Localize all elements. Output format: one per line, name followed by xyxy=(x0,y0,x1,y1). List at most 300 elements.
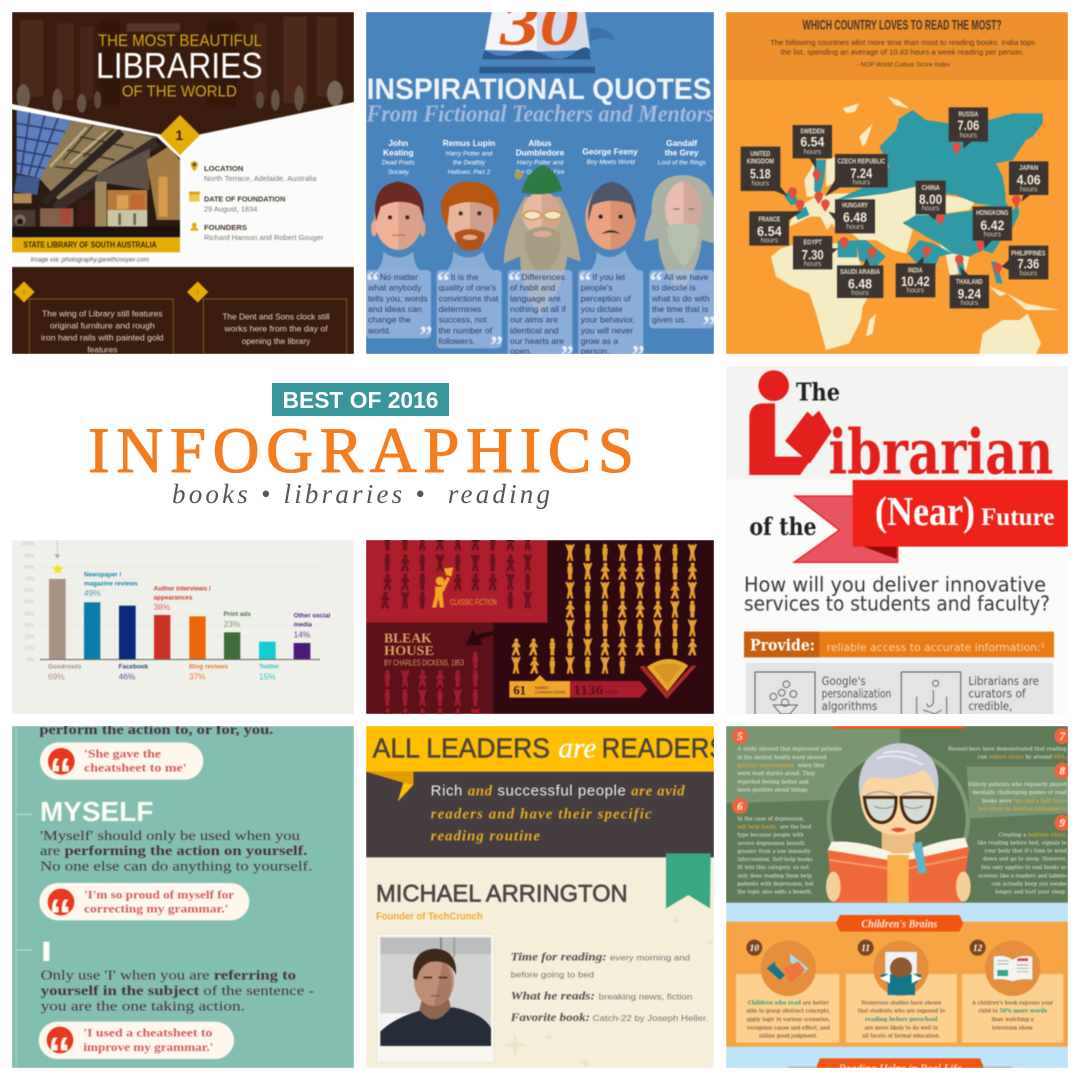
fact 8: 8 xyxy=(1059,766,1065,778)
stat bar: characters and pages: CHARACTERS xyxy=(535,691,566,695)
example: improve my grammar xyxy=(39,1022,234,1079)
callout: India: 10.42 xyxy=(901,273,930,289)
quote: George Feeny: grow as a xyxy=(581,336,618,346)
comparison box: algorithms xyxy=(822,699,877,713)
callout: Thailand xyxy=(950,267,989,308)
quote: Remus Lupin: convictions that xyxy=(439,293,499,303)
caption band xyxy=(12,237,180,252)
image credit: Image via: photography.garethcooper.com xyxy=(31,257,149,264)
quote: Gandalf: All we have xyxy=(664,272,708,282)
fact 6: patients with depression, but xyxy=(737,881,815,887)
mentor names: Lord of the Rings xyxy=(658,160,707,167)
quote: John Keating: and ideas can xyxy=(368,304,422,314)
icon: picture book xyxy=(993,955,1033,982)
quote: Gandalf xyxy=(649,265,716,340)
intro text: The following countries allot more time than most to reading books. India tops xyxy=(770,38,1035,47)
fact 5: more positive about things. xyxy=(737,787,809,793)
fact 7: Researchers have demonstrated that reading xyxy=(948,747,1067,753)
badge: best of 2016: BEST OF 2016 xyxy=(282,387,438,413)
quote: John Keating: tells you, words xyxy=(368,293,428,303)
reading routine text xyxy=(510,950,708,1024)
card text: are more likely to do well in xyxy=(865,1025,939,1031)
fact box: wing of library: iron hand rails with painted gold xyxy=(41,332,164,342)
section: children's brains: Children's Brains xyxy=(861,916,938,930)
bar labels: Facebook xyxy=(119,664,149,671)
quote: Remus Lupin: It is the xyxy=(451,272,479,282)
intro text: the list, spending an average of 10.43 hours a week reading per person. xyxy=(781,48,1024,57)
quote: George Feeny: you will never xyxy=(581,325,633,335)
bar labels: 49% xyxy=(84,588,101,598)
reading routine text: every morning and xyxy=(610,953,690,963)
dark figures on red xyxy=(381,534,532,608)
fact 8: mentally challenging games or read xyxy=(973,790,1067,796)
quote: Gandalf: what to do with xyxy=(651,293,710,303)
bar labels: 38% xyxy=(154,602,171,612)
header band: are xyxy=(558,732,596,764)
fact 5: reported feeling better and xyxy=(737,779,809,785)
arrow xyxy=(466,629,493,645)
callout: Czech Republic: hours xyxy=(853,179,871,186)
label: classic fiction: CLASSIC FICTION xyxy=(450,598,497,607)
quote: Gandalf: ” xyxy=(703,310,716,340)
mentor names: Society xyxy=(388,169,410,176)
library facts: North Terrace, Adelaide, Australia xyxy=(204,174,317,183)
china xyxy=(903,203,1016,257)
callout: Russia: 7.06 xyxy=(957,117,980,133)
fact 6: 6 xyxy=(737,801,743,813)
callout: Hongkong: 6.42 xyxy=(980,217,1005,233)
callout: United Kingdom: 5.18 xyxy=(750,165,771,181)
text: perform the action: perform the action to, or for, you. xyxy=(39,723,273,738)
bar labels: Goodreads xyxy=(48,664,82,671)
callout: Thailand: THAILAND xyxy=(956,279,983,286)
callout: United Kingdom: KINGDOM xyxy=(747,158,774,165)
callout: Japan xyxy=(1009,161,1048,202)
card text: than watching a xyxy=(992,1017,1034,1023)
icon: library reader logo xyxy=(749,370,832,475)
heading: inspirational quotes xyxy=(366,73,714,128)
intro band: Rich and successful people are avid xyxy=(431,783,685,800)
name: Michael Arrington: Founder of TechCrunch xyxy=(376,911,483,922)
quote: Albus Dumbledore: language are xyxy=(510,293,561,303)
callout: France: hours xyxy=(761,237,779,244)
card text: child to 50% more words xyxy=(978,1009,1047,1015)
fact 9: screens like e-readers and tablets xyxy=(978,873,1067,879)
card text: Numerous studies have shown xyxy=(861,1000,942,1006)
callout: France xyxy=(749,211,802,246)
fact 9: can actually keep you awake xyxy=(992,881,1067,887)
africa xyxy=(771,243,876,350)
portrait: Gandalf the Grey xyxy=(645,175,714,293)
quote: John Keating: “ xyxy=(366,265,379,295)
quote: Remus Lupin: quality of one's xyxy=(439,283,497,293)
provide bar: Provide: xyxy=(750,636,815,655)
quote: George Feeny xyxy=(578,265,645,369)
quote: John Keating: No matter xyxy=(380,272,418,282)
quote: Albus Dumbledore: our hearts are xyxy=(510,336,564,346)
number badges: 10 xyxy=(750,944,759,954)
reading routine text: Catch-22 by Joseph Heller. xyxy=(593,1013,708,1023)
callout: Sweden xyxy=(793,125,832,168)
stat bar: characters and pages: 1136 xyxy=(573,683,603,698)
bar labels: magazine reviews xyxy=(84,580,138,587)
icon: child reading xyxy=(880,952,922,995)
fact 8: Elderly patients who regularly played xyxy=(968,782,1067,788)
y axis labels: 100% xyxy=(22,542,35,548)
example: proud of myself: 'I'm so proud of myself for xyxy=(84,889,234,901)
quote: Remus Lupin: followers. xyxy=(439,336,475,346)
fact 6: greater from a low intensity xyxy=(737,849,811,855)
quote: George Feeny: people's xyxy=(581,283,613,293)
ribbon: near future: Future xyxy=(981,503,1054,531)
quote: George Feeny: “ xyxy=(578,265,592,295)
callout: Hungary: 6.48 xyxy=(843,209,867,225)
text: myself rule: No one else can do anything to yourself. xyxy=(40,860,312,875)
panel: all leaders are readers xyxy=(366,726,727,1068)
header band xyxy=(366,726,727,772)
fact box: clock: works here from the day of xyxy=(223,324,328,334)
callout: China: CHINA xyxy=(922,185,940,192)
philippines xyxy=(991,262,1003,283)
example: proud of myself xyxy=(39,883,249,941)
fact box: clock: The Dent and Sons clock still xyxy=(222,311,330,321)
mentor names: Dumbledore xyxy=(516,147,565,157)
reading routine text: Time for reading: xyxy=(511,950,607,964)
y axis labels: 70% xyxy=(24,576,35,582)
quote: Gandalf: given us. xyxy=(652,315,687,325)
card text: reading before preschool xyxy=(865,1017,938,1023)
y axis labels: 90% xyxy=(24,553,35,559)
card text: utilize good judgment. xyxy=(759,1033,818,1039)
bar labels: 23% xyxy=(224,619,241,629)
example: cheatsheet to me xyxy=(40,742,203,801)
indochina xyxy=(939,243,969,277)
fact 6: only does reading them help xyxy=(737,873,812,879)
mentor names: George Feeny xyxy=(582,147,638,157)
callout: Russia xyxy=(949,107,988,148)
heading: of the: of the xyxy=(749,512,817,541)
callout: United Kingdom: UNITED xyxy=(750,151,770,158)
callout: Czech Republic xyxy=(825,154,888,197)
text: myself rule xyxy=(40,829,312,875)
intro text xyxy=(770,38,1035,69)
fact 6: In the case of depression, xyxy=(737,817,805,823)
icon: open book fan xyxy=(639,659,697,699)
stat bar: characters and pages xyxy=(509,675,647,698)
reading routine text: breaking news, fiction xyxy=(599,991,693,1001)
reading routine text: What he reads: xyxy=(511,988,595,1002)
bars xyxy=(40,579,320,660)
stat bar: characters and pages: 61 xyxy=(513,683,526,697)
fact box: wing of library: The wing of Library still features xyxy=(42,308,163,318)
heading: bleak house: BLEAK xyxy=(384,631,432,646)
fact box: wing of library: features xyxy=(87,345,117,355)
example: proud of myself: “ xyxy=(49,889,72,941)
card text: able to grasp abstract concepts, xyxy=(746,1009,831,1015)
callout: Philippines: PHILIPPINES xyxy=(1011,251,1046,258)
fact 6: the topic also adds a benefit. xyxy=(737,889,813,895)
fact 6: self help books xyxy=(737,825,777,831)
callout: Sweden: SWEDEN xyxy=(800,128,825,135)
fact 6: type because people with xyxy=(737,833,805,839)
fact 5: A study showed that depressed patients xyxy=(736,747,842,753)
y axis labels: 10% xyxy=(24,646,35,652)
question text: How will you deliver innovative xyxy=(744,573,1046,597)
quote: John Keating: change the xyxy=(368,315,411,325)
bar labels: Newspaper / xyxy=(84,571,122,578)
fact 7 xyxy=(948,728,1070,761)
callout: Japan: hours xyxy=(1020,186,1038,193)
fact 5: positive improvement xyxy=(737,763,795,769)
name: Michael Arrington xyxy=(376,881,628,922)
photo: state library interior xyxy=(12,109,180,237)
egypt xyxy=(838,241,857,257)
illustration: woman reading xyxy=(826,743,971,903)
card text: all facets of formal education. xyxy=(862,1033,941,1039)
fact 6: severe depression benefit xyxy=(737,841,805,847)
quote: George Feeny: you dictate xyxy=(581,304,623,314)
callout: Egypt: EGYPT xyxy=(804,239,822,246)
fact 9: down and go to sleep. However, xyxy=(983,857,1067,863)
callout: Egypt xyxy=(793,236,838,269)
quote: George Feeny: perception of xyxy=(581,293,631,303)
heading: bleak house: BY CHARLES DICKENS, 1853 xyxy=(384,659,464,668)
portrait: George Feeny xyxy=(585,182,638,271)
callout: China xyxy=(916,181,946,220)
callout: Philippines xyxy=(1002,246,1048,279)
card text: that students who are exposed to xyxy=(858,1009,945,1015)
bar labels: 37% xyxy=(189,672,206,682)
comparison box: credible, xyxy=(968,699,1012,713)
card text xyxy=(746,1000,1054,1039)
example: cheatsheet to me: “ xyxy=(49,749,72,801)
card text: recognize cause and effect, and xyxy=(747,1025,830,1031)
quote: Remus Lupin: success, not xyxy=(439,315,487,325)
fact 5: in the mental health ward showed xyxy=(737,755,827,761)
mentor names: the Goblet of Fire xyxy=(516,169,565,176)
callout: Philippines: hours xyxy=(1020,270,1038,277)
y axis labels: 40% xyxy=(24,611,35,617)
bar labels: 14% xyxy=(294,629,311,639)
comparison box: Librarians are xyxy=(968,674,1039,688)
panel: grammar guide xyxy=(12,723,354,1079)
comparison box: personalization xyxy=(822,686,891,700)
fact 6: fit into this category, so not xyxy=(737,865,810,871)
fact 8: books were two and a half times xyxy=(982,798,1067,804)
library facts: DATE OF FOUNDATION xyxy=(204,195,286,204)
callout: India xyxy=(896,257,935,297)
white card background xyxy=(12,102,354,267)
example: improve my grammar: improve my grammar.' xyxy=(83,1042,213,1054)
callout: Hungary: hours xyxy=(846,224,864,231)
callout: Thailand: 9.24 xyxy=(958,285,981,301)
callout: Hongkong: HONGKONG xyxy=(976,210,1009,217)
callout: Saudi Arabia: hours xyxy=(851,290,869,297)
quote: George Feeny: If you let xyxy=(592,272,626,282)
callout: India: INDIA xyxy=(908,267,923,274)
quote: John Keating: ” xyxy=(419,320,433,350)
bar labels: 46% xyxy=(119,672,136,682)
portrait: Albus Dumbledore xyxy=(504,165,581,317)
map pins xyxy=(788,142,1021,276)
example: cheatsheet to me: cheatsheet to me' xyxy=(84,763,187,775)
library facts: Richard Hanson and Robert Gouger xyxy=(204,233,324,242)
callout: Russia: hours xyxy=(960,132,978,139)
ribbon: near future xyxy=(794,480,1068,562)
quote: Albus Dumbledore: ” xyxy=(561,339,574,369)
intro band: readers and have their specific xyxy=(431,806,652,822)
india xyxy=(908,240,953,273)
card text: Children who read are better xyxy=(748,1000,829,1006)
callout: Hungary xyxy=(828,199,875,233)
number badges: 11 xyxy=(861,944,870,954)
quote: Gandalf: the time that is xyxy=(652,304,709,314)
japan xyxy=(1011,203,1019,230)
portrait: John Keating xyxy=(371,182,426,271)
panel: most beautiful libraries xyxy=(12,12,354,355)
sweden xyxy=(814,160,826,193)
ribbon: near future: (Near) xyxy=(875,489,975,535)
callout: Hungary: HUNGARY xyxy=(842,203,868,210)
callout: Saudi Arabia: 6.48 xyxy=(848,275,872,291)
library facts: LOCATION xyxy=(204,164,244,173)
fact 5: were read stories aloud. They xyxy=(737,771,815,777)
fact 9: like reading before bed, signals to xyxy=(977,841,1067,847)
quote: John Keating: what anybody xyxy=(367,283,422,293)
example: improve my grammar: 'I used a cheatsheet to xyxy=(83,1028,213,1040)
subtitle: books • libraries • reading xyxy=(172,479,550,509)
callout: Saudi Arabia xyxy=(837,258,883,298)
callout: Thailand: hours xyxy=(961,300,979,307)
photo: Michael Arrington xyxy=(377,934,494,1063)
mentor names: Boy Meets World xyxy=(587,159,635,166)
intro text: - NOP World Culture Score Index xyxy=(857,62,951,69)
panel: reading and brain health xyxy=(726,726,1068,1075)
panel: librarian of the near future xyxy=(726,366,1068,714)
character figures on dark red xyxy=(383,652,480,725)
comparison box: Google's xyxy=(822,674,866,688)
heading: the: The xyxy=(796,378,840,407)
heading: infographics: INFOGRAPHICS xyxy=(88,415,634,487)
provide bar xyxy=(744,632,1054,657)
callout: Hongkong: hours xyxy=(984,232,1002,239)
callout: China: 8.00 xyxy=(919,191,943,207)
card text: A children's book exposes your xyxy=(971,1000,1054,1006)
character figures grid xyxy=(512,544,697,673)
mentor names: Hallows: Part 2 xyxy=(448,169,491,176)
heading: bleak house xyxy=(384,631,464,668)
mentor names: Dead Poets xyxy=(382,160,416,167)
mentor names: Albus xyxy=(528,138,552,148)
icon: star and arrow xyxy=(52,540,63,574)
fact 7: can reduce stress by around 68%. xyxy=(978,755,1067,761)
mentor names: Gandalf xyxy=(666,138,697,148)
heading: myself: MYSELF xyxy=(40,796,153,827)
fact 9 xyxy=(977,815,1070,895)
united kingdom and france xyxy=(784,187,799,205)
example: improve my grammar: “ xyxy=(48,1027,71,1079)
text: myself rule: 'Myself' should only be used when you xyxy=(40,829,300,844)
quote: Remus Lupin: determines xyxy=(439,304,482,314)
quote: Gandalf: “ xyxy=(649,265,663,295)
quote: George Feeny: person. xyxy=(581,346,610,356)
mentor names: Harry Potter and xyxy=(446,150,493,157)
callout: France: 6.54 xyxy=(757,223,782,239)
bar labels: appearances xyxy=(154,594,193,601)
library facts: FOUNDERS xyxy=(204,223,247,232)
callout: Japan: JAPAN xyxy=(1019,165,1038,172)
fact 6: intervention. Self-help books xyxy=(737,857,813,863)
y axis labels: 60% xyxy=(24,588,35,594)
panel: inspirational quotes xyxy=(366,0,716,369)
callout: Czech Republic: CZECH REPUBLIC xyxy=(837,158,885,165)
y axis labels xyxy=(22,542,35,664)
mentor names: Remus Lupin xyxy=(443,138,495,148)
caption band: STATE LIBRARY OF SOUTH AUSTRALIA xyxy=(23,240,157,249)
library facts xyxy=(189,161,324,242)
fact 9: longer and hurt your sleep. xyxy=(995,889,1067,895)
example: proud of myself: correcting my grammar.' xyxy=(84,904,228,916)
fact 8 xyxy=(968,763,1070,813)
quote: Albus Dumbledore: open. xyxy=(510,346,532,356)
bar labels: media xyxy=(294,622,312,629)
bar labels: Author interviews / xyxy=(154,586,211,593)
number diamond xyxy=(160,115,200,155)
title block xyxy=(88,383,634,509)
bar labels: 69% xyxy=(48,672,65,682)
callout: Sweden: hours xyxy=(804,149,822,156)
callout: France: FRANCE xyxy=(759,217,780,224)
callout: Japan: 4.06 xyxy=(1017,172,1041,188)
quote: Albus Dumbledore: Differences xyxy=(521,272,566,282)
mentor names: the Grey xyxy=(665,147,699,157)
fact 6 xyxy=(732,798,815,895)
fact 7: 7 xyxy=(1059,731,1066,743)
quote: Remus Lupin: ” xyxy=(490,330,503,360)
mentor names xyxy=(382,138,707,176)
number badges: 12 xyxy=(973,944,983,954)
fact 9: your body that it's time to wind xyxy=(984,849,1067,855)
intro band: reading routine xyxy=(431,829,540,845)
islands and australia xyxy=(804,97,1059,354)
bar labels: Print ads xyxy=(224,611,251,618)
callout: India: hours xyxy=(907,288,925,295)
section banner: reading helps xyxy=(788,1058,1012,1075)
icon: green bookmark xyxy=(666,853,711,908)
text: I rule: Only use 'I' when you are referring to xyxy=(41,968,296,983)
callout: Russia: RUSSIA xyxy=(958,112,978,119)
saudi arabia xyxy=(856,240,886,267)
fact 9: this only applies to real books as xyxy=(981,865,1067,871)
header band: ALL LEADERS xyxy=(373,732,550,763)
icon: puzzle blocks xyxy=(767,953,808,983)
highlighted figure with hammer xyxy=(432,567,453,608)
reading routine text: before going to bed xyxy=(511,969,594,979)
bar labels: Blog reviews xyxy=(189,664,229,671)
provide bar: reliable access to accurate information:¹ xyxy=(827,641,1045,654)
quote: Remus Lupin xyxy=(437,265,503,360)
bar labels: 15% xyxy=(259,672,276,682)
comparison box xyxy=(746,663,1053,722)
reading routine text: Favorite book: xyxy=(510,1010,590,1024)
callout: Sweden: 6.54 xyxy=(800,134,825,150)
fact 5 xyxy=(732,728,842,793)
y axis labels: 50% xyxy=(24,600,35,606)
quote: Albus Dumbledore: identical and xyxy=(510,325,559,335)
library facts: 29 August, 1834 xyxy=(204,205,258,214)
fact 5: when they xyxy=(796,763,825,769)
stat bar: characters and pages: NAMED xyxy=(535,686,549,690)
